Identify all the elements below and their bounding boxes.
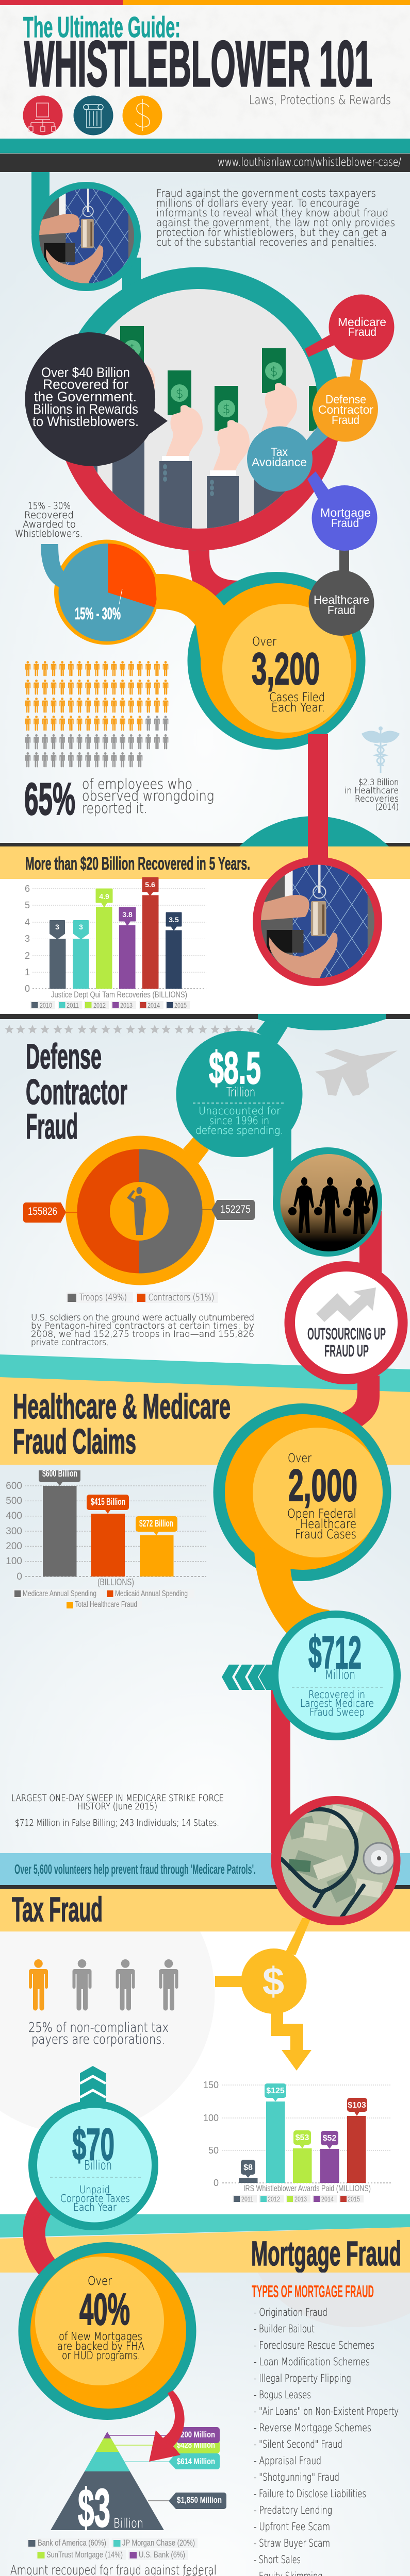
connector: stethoscope to dollar [285,1918,311,1955]
whistle photo circle: red [253,857,382,986]
dark divider [0,1885,410,1889]
caption: healthcare recoveries: in Healthcare [345,786,399,796]
people: 25 percent corporations [29,1959,178,2010]
light circle backdrop [0,1931,215,2134]
pyramid chart: mortgage recoveries [51,2427,226,2538]
$712 million circle: Fraud Sweep [309,1706,365,1718]
soldier photo circle [273,1147,387,1257]
value tooltips: 5.6 [145,880,155,889]
speech bubble: over $40 billion: to Whistleblowers. [32,414,139,429]
big ring with money hands [57,267,344,550]
heading: defense contractor fraud: Defense [26,1037,102,1076]
teal connector: top bar [31,172,50,234]
banner: medicare patrols [0,1853,410,1885]
header panel [0,0,410,139]
red curve: $70 to 40 percent [34,2197,59,2280]
bar chart: healthcare spending: (BILLIONS) [97,1577,134,1587]
shirt cuffs [162,434,259,476]
3,200 circle [155,572,365,750]
list: types of mortgage fraud: - Upfront Fee Scam [254,2520,330,2533]
chart legend: Total Healthcare Fraud [75,1600,137,1609]
$8.5 trillion circle: Trillion [226,1085,255,1099]
chart legend: 2010 [40,1001,52,1009]
caption: 15-30 percent: 15% - 30% [28,500,71,512]
chart legend: 2015 [348,2195,360,2203]
bar chart: irs awards [203,2080,391,2203]
intro paragraph: protection for whistleblowers, but they can get a [156,226,387,239]
value tooltips: $103 [348,2101,366,2110]
banner: tax fraud [0,1889,410,1931]
speech bubble: over $40 billion: Recovered for [43,377,128,392]
tag: $1,850 million: $1,850 Million [177,2495,222,2505]
tag: contractors count [23,1202,77,1223]
defense contractor fraud bubble [313,376,378,442]
value tooltips [50,878,181,939]
list: types of mortgage fraud: - "Silent Second" Fraud [254,2438,342,2450]
tag: $1,850 million [148,2493,226,2509]
stat: 65 percent: of employees who [82,775,192,792]
list: types of mortgage fraud: - Origination Fraud [254,2306,327,2318]
bar chart: qui tam recoveries: 1 [25,967,30,977]
medicare fraud bubble [329,295,394,360]
healthcare fraud bubble: Fraud [327,603,355,617]
heading: healthcare and medicare fraud claims: Fraud Claims [13,1422,136,1461]
text: 25 percent [28,2020,169,2047]
connector: dome to $8.5 [256,1019,288,1044]
arrow: red curved [149,2391,185,2462]
speech bubble: over $40 billion [25,332,168,466]
heading: defense contractor fraud: Contractor [26,1072,127,1112]
yellow banner: healthcare [0,1377,410,1465]
paragraph: soldiers outnumbered: 2008, we had 152,275 troops in Iraq—and 155,826 [31,1329,254,1340]
stat: 65 percent: reported it. [82,800,147,817]
star row [5,1025,256,1033]
3,200 circle: Each Year. [271,701,325,715]
chart legend: Medicare Annual Spending [23,1589,96,1598]
tax avoidance bubble: Tax [271,445,288,459]
tag: $614 million: $614 Million [177,2456,215,2466]
40 percent circle: 40% [79,2285,130,2334]
list: types of mortgage fraud: - Appraisal Fraud [254,2454,321,2467]
connector: defense to tax [304,424,328,452]
40 percent circle: Over [88,2275,112,2288]
pyramid legend: U.S. Bank (6%) [139,2550,185,2560]
speech bubble: over $40 billion: Billions in Rewards [33,401,138,417]
text: largest one-day sweep: LARGEST ONE-DAY SWEEP IN MEDICARE STRIKE FORCE [11,1793,224,1804]
caption: healthcare recoveries: (2014) [375,802,399,812]
stat: 65 percent: 65% [24,773,75,824]
url band [0,139,410,172]
$8.5 trillion circle: Unaccounted for [199,1105,281,1117]
bar chart: irs awards: 0 [214,2178,219,2188]
chart legend: 2011 [241,2195,253,2203]
text: largest one-day sweep: $712 Million in False Billing; 243 Individuals; 14 States. [15,1818,219,1828]
orange connector from pie [155,574,229,680]
chart legend: 2012 [93,1001,106,1009]
value tooltips: 3.5 [169,916,179,924]
tag: contractors count: 155826 [28,1206,57,1217]
caption: 15-30 percent: Whistleblowers. [15,528,83,539]
chart legend: 2012 [268,2195,280,2203]
$8.5 trillion circle [176,1031,302,1157]
value tooltips: 3 [79,923,83,931]
mortgage fraud bubble: Mortgage [320,506,371,519]
banner: more than $20 billion: More than $20 Billion Recovered in 5 Years. [25,854,250,874]
icon: saluting soldier [127,1187,146,1235]
connector: bar left of dollar [215,1976,243,1987]
text: 25 percent: payers are corporations. [31,2032,165,2047]
value tooltips: $52 [323,2134,336,2143]
list: types of mortgage fraud: - Foreclosure Rescue Schemes [254,2339,374,2351]
$712 million circle: Recovered in [308,1688,365,1701]
blue hook [41,544,64,587]
bar chart: healthcare spending: 300 [6,1526,22,1537]
panel: mortgage background [0,2273,410,2576]
value tooltips: $125 [266,2087,285,2095]
chart legend [30,1001,190,1009]
2,000 circle: 2,000 [288,1461,357,1511]
$712 million circle [271,1611,401,1740]
paragraph: soldiers outnumbered [31,1313,254,1348]
gray circle backdrop [258,2273,410,2327]
icon: dollar circle [241,1948,306,2014]
$8.5 trillion circle: since 1996 in [209,1114,269,1127]
red connector [308,734,328,863]
paragraph: soldiers outnumbered: by Pentagon-hired contractors at certain times: by [31,1321,254,1331]
list: types of mortgage fraud: - Short Sales [254,2553,301,2566]
mortgage fraud bubble: Fraud [331,516,359,530]
tax avoidance bubble [247,427,313,492]
tag: $428 million [114,2440,220,2453]
bar chart: qui tam recoveries: 5 [25,900,30,910]
$8.5 trillion circle: $8.5 [209,1042,261,1093]
paragraph: soldiers outnumbered: private contractors. [31,1337,109,1348]
caption: 15-30 percent: Awarded to [23,519,76,530]
list: types of mortgage fraud: - Straw Buyer Scam [254,2537,330,2549]
bar chart: healthcare spending: 100 [6,1556,22,1567]
icon: rising arrow [316,1287,376,1322]
outsourcing up fraud up circle [285,1261,407,1384]
red stem: outsourcing to 2,000 [338,1376,380,1426]
defense contractor fraud bubble: Contractor [318,403,373,416]
bar chart: irs awards: 50 [208,2145,219,2156]
heading: healthcare and medicare fraud claims: Healthcare & Medicare [13,1387,231,1426]
defense contractor fraud bubble: Fraud [332,413,359,427]
$712 million circle: $712 [308,1626,362,1678]
tag: $428 million: $428 Million [177,2440,215,2450]
panel: healthcare background [0,1465,410,1853]
bar chart: healthcare spending: 0 [17,1571,22,1582]
tag: $200 million [109,2427,220,2443]
3,200 circle: 3,200 [252,644,320,694]
caption: healthcare recoveries: Recoveries [355,794,399,804]
$8.5 trillion circle: defense spending. [195,1124,283,1137]
pie chart: award share: 15% - 30% [75,604,121,623]
defense contractor fraud bubble: Defense [325,393,366,406]
donut legend [66,1292,218,1303]
speech bubble: over $40 billion: the Government. [34,389,137,404]
medicare fraud bubble: Fraud [348,325,376,338]
people pictogram: 65 percent [25,661,168,767]
list: types of mortgage fraud: - Failure to Disclose Liabilities [254,2487,366,2500]
teal stem to soldier photo [273,1128,291,1195]
pyramid legend: Bank of America (60%) [38,2538,106,2548]
value tooltips: $272 Billion [139,1518,173,1529]
bar chart: healthcare spending [6,1468,206,1609]
panel: intro section background [0,172,410,843]
chart legend [233,2195,364,2203]
stat: 65 percent [24,773,214,824]
teal arc [258,1014,386,1030]
medicare fraud bubble: Medicare [338,315,386,329]
hands [145,365,316,470]
value tooltips: $8 [243,2163,253,2172]
intro paragraph: informants to reveal what they know about fraud [156,207,388,219]
bar chart: healthcare spending: 600 [6,1481,22,1492]
2,000 circle: Fraud Cases [295,1527,356,1541]
value tooltips: $53 [296,2133,309,2142]
tag: $200 million: $200 Million [177,2430,215,2439]
arrow: zigzag down [271,2009,311,2071]
tax avoidance bubble: Avoidance [252,455,307,469]
$70 billion circle [28,2100,158,2230]
icon: pillar [73,96,113,135]
$70 billion circle: Each Year [73,2201,117,2213]
3,200 circle: Over [252,635,276,649]
connector: ring to medicare [305,335,334,357]
chart legend: 2014 [147,1001,160,1009]
icon: dollar circle: $ [263,1960,284,2004]
dark divider [0,1014,410,1019]
bar chart: healthcare spending: 500 [6,1496,22,1506]
$712 million circle: Largest Medicare [300,1697,374,1709]
pyramid chart: mortgage recoveries: Billion [113,2516,143,2531]
chart legend: Medicaid Annual Spending [115,1589,188,1598]
text: largest one-day sweep: HISTORY (June 2015) [77,1801,157,1812]
list: types of mortgage fraud: - Loan Modification Schemes [254,2355,370,2368]
heading: defense contractor fraud [26,1037,127,1146]
tag: $614 million [124,2453,220,2469]
intro paragraph [156,187,395,248]
pyramid legend [27,2538,198,2560]
bar chart: healthcare spending: 400 [6,1511,22,1521]
value tooltips: $600 Billion [42,1468,77,1479]
value tooltips [39,1468,177,1535]
text: 25 percent: 25% of non-compliant tax [28,2020,169,2036]
panel: defense background [0,1019,410,1385]
stat: 65 percent: observed wrongdoing [82,787,214,804]
bar chart: irs awards: 100 [203,2113,219,2123]
intro paragraph: cut of the substantial recoveries and penalties. [156,236,377,248]
chart legend: 2011 [67,1001,79,1009]
list: types of mortgage fraud: - Predatory Lending [254,2504,332,2516]
list: types of mortgage fraud: - "Shotgunning" Fraud [254,2471,339,2483]
pie chart: award share [54,540,159,645]
red stem: soldiers to outsourcing [359,1211,382,1278]
banknotes [120,326,333,431]
value tooltips [241,2083,367,2178]
pyramid legend: SunTrust Mortgage (14%) [46,2550,123,2560]
list: types of mortgage fraud: - Reverse Mortgage Schemes [254,2421,371,2434]
teal connector: photo to ring [122,258,141,307]
tag: troops count [201,1200,255,1220]
icon: dollar [123,96,162,135]
$712 million circle: Million [325,1667,355,1682]
outsourcing up fraud up circle: FRAUD UP [324,1342,369,1360]
value tooltips: 4.9 [99,892,109,901]
$70 billion circle: Billion [84,2158,112,2173]
$70 billion circle: $70 [72,2120,114,2170]
caption: healthcare recoveries: $2.3 Billion [358,777,399,788]
chart legend: 2013 [294,2195,307,2203]
heading: defense contractor fraud: Fraud [26,1107,78,1146]
connector: tax to mortgage [307,471,330,502]
caption: healthcare recoveries [345,777,399,812]
panel: recoveries white background [0,879,410,1014]
mortgage fraud bubble [311,485,378,551]
2,000 circle: Open Federal [287,1506,356,1521]
bar chart: qui tam recoveries: 2 [25,951,30,961]
chart legend: 2013 [120,1001,133,1009]
$70 billion circle: Corporate Taxes [60,2192,130,2205]
red stem: $712 to stethoscope [271,1690,290,1865]
pyramid chart: mortgage recoveries: $3 [78,2478,110,2538]
speech bubble: over $40 billion: Over $40 Billion [41,365,130,380]
2,000 circle: Healthcare [300,1517,356,1531]
bar chart: qui tam recoveries: Justice Dept Qui Tam Recoveries (BILLIONS) [51,990,187,999]
slanted teal band [0,1354,410,1422]
healthcare fraud bubble: Healthcare [314,593,369,606]
caption: 15-30 percent: Recovered [24,510,74,521]
text: largest one-day sweep [11,1793,224,1828]
healthcare fraud bubble [308,570,374,636]
top stripe [0,0,410,5]
tag: troops count: 152275 [220,1204,251,1215]
3,200 circle: Cases Filed [269,691,325,704]
chart legend [13,1589,194,1609]
2,000 circle [214,1403,391,1636]
connector: medicare to defense [349,355,364,381]
40 percent circle: of New Mortgages [59,2330,142,2343]
stethoscope money photo [271,1796,400,1925]
value tooltips: $415 Billion [91,1497,125,1507]
bar chart: qui tam recoveries: 6 [25,884,30,894]
connector: mortgage to healthcare [339,546,349,574]
bar chart: irs awards: 150 [203,2080,219,2090]
chart legend: 2014 [321,2195,334,2203]
value tooltips: 3.8 [122,910,133,919]
intro paragraph: against the government, the law not only provides [156,216,395,229]
teal dome [239,816,389,846]
icon: fighter jet [315,1049,398,1096]
whistle photo circle [31,182,141,291]
sleeve buttons [163,464,214,496]
value tooltips: 3 [55,923,59,931]
list: types of mortgage fraud: - Illegal Property Flipping [254,2372,351,2384]
red stem to 3,200 circle [188,541,240,611]
icon: caduceus [362,726,400,773]
bar chart: qui tam recoveries [25,878,206,1009]
donut chart: troops vs contractors [23,1136,255,1285]
list: types of mortgage fraud [252,2282,399,2576]
banner: tax fraud: Tax Fraud [12,1890,103,1929]
teal band [0,2214,410,2238]
arrow: double chevron up [80,2066,106,2105]
dark divider [0,843,410,846]
intro paragraph: Fraud against the government costs taxpayers [156,187,376,199]
arrow: chevrons [222,1665,278,1690]
banner: more than $20 billion [0,846,410,879]
$70 billion circle: Unpaid [79,2183,110,2196]
donut legend: Troops (49%) [79,1292,127,1303]
icon: network [23,96,63,135]
chart legend: 2015 [174,1001,187,1009]
heading: healthcare and medicare fraud claims [13,1387,231,1461]
40 percent circle [19,2242,196,2420]
list: types of mortgage fraud: - Builder Bailout [254,2323,315,2335]
bar chart: qui tam recoveries: 3 [25,934,30,944]
pyramid legend: JP Morgan Chase (20%) [122,2538,195,2548]
intro paragraph: millions of dollars every year. To encourage [156,197,359,209]
bar chart: healthcare spending: 200 [6,1541,22,1552]
donut legend: Contractors (51%) [149,1292,215,1303]
title: the ultimate guide: The Ultimate Guide: [23,11,181,44]
40 percent circle: or HUD programs. [62,2349,140,2362]
list: types of mortgage fraud: - Bogus Leases [254,2388,311,2401]
caption: 15-30 percent [15,500,83,539]
40 percent circle: are backed by FHA [57,2340,144,2352]
paragraph: soldiers outnumbered: U.S. soldiers on the ground were actually outnumbered [31,1313,254,1323]
panel: tax white background [0,1931,410,2214]
orange connector [254,1546,330,1636]
suit sleeves [93,439,286,529]
bar chart: qui tam recoveries: 0 [25,984,30,994]
banner: mortgage fraud [0,2227,410,2273]
bar chart: qui tam recoveries: 4 [25,917,30,927]
connector: orange to $8.5 [183,1136,209,1163]
2,000 circle: Over [288,1452,311,1465]
